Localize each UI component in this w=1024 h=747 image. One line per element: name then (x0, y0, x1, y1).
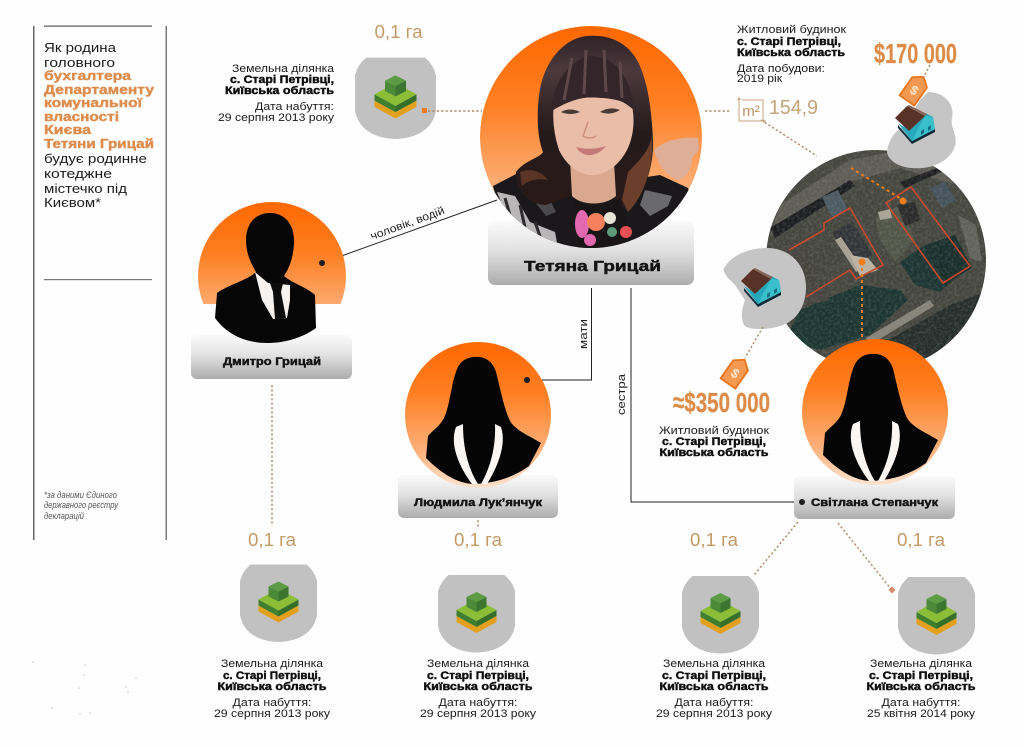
text: house two details: с. Старі Петрівці, (662, 436, 766, 448)
name box: Tetiana: Тетяна Грицай (524, 258, 661, 275)
house one group (887, 92, 956, 168)
dashed link: Svitlana second plot (838, 523, 891, 589)
dashed link: top plot (428, 110, 482, 112)
text: house two details (659, 425, 769, 459)
marker: top plot (422, 108, 427, 113)
dashed link: Dmytro plot (271, 385, 273, 526)
footnote: державного реєстру (44, 500, 118, 510)
intro text: комунальної (44, 95, 142, 110)
text: Liudmyla plot: 29 серпня 2013 року (420, 708, 537, 720)
text: Svitlana second plot: с. Старі Петрівці, (869, 670, 973, 682)
intro text: містечко під (44, 181, 127, 196)
intro text: котеджне (44, 166, 112, 181)
text: top plot: Земельна ділянка (232, 63, 335, 75)
text: Dmytro plot: Київська область (218, 681, 327, 693)
link dot: Svitlana (799, 499, 805, 505)
area: Liudmyla plot: 0,1 га (454, 530, 503, 550)
text: house one details: Житловий будинок (737, 24, 846, 36)
icon: land Svitlana first (682, 576, 759, 654)
intro text (44, 40, 155, 210)
dashed link: portrait to area (705, 110, 731, 112)
link dot: Liudmyla (524, 377, 530, 383)
orange circle: Svitlana (802, 339, 948, 485)
marker: house one (900, 198, 906, 204)
icon: land Liudmyla (438, 575, 515, 652)
hand (654, 138, 699, 180)
land plot: Svitlana first (656, 522, 798, 720)
dashed link: price one (923, 65, 930, 78)
text: Svitlana second plot: Київська область (866, 681, 976, 693)
person: Tetiana (480, 26, 702, 285)
text: Liudmyla plot: Дата набуття: (438, 697, 518, 709)
text: Svitlana second plot: 25 квітня 2014 року (867, 708, 976, 720)
orange circle: Dmytro (198, 202, 346, 304)
text: house two details: Київська область (660, 447, 769, 459)
icon: price tag two (721, 355, 752, 389)
dashed link: map to house one (761, 120, 817, 156)
intro text: Києва (44, 122, 92, 137)
footnote: *за даними Єдиного (44, 490, 117, 500)
dashed link: on map to house one (851, 168, 903, 200)
text: Dmytro plot: 29 серпня 2013 року (214, 708, 331, 720)
portrait (480, 26, 702, 250)
shirt (578, 198, 630, 248)
land parcels outlines (789, 187, 970, 297)
person: Dmytro (191, 202, 352, 379)
text: house one details: Київська область (737, 47, 845, 59)
intro text: головного (44, 55, 115, 70)
text: house one details: Дата побудови: (737, 63, 825, 75)
jacket (493, 172, 695, 250)
name box: Liudmyla: Людмила Лук’янчук (414, 497, 543, 509)
text: Svitlana second plot: Дата набуття: (882, 697, 960, 709)
neck (570, 166, 616, 204)
land plot: Svitlana second (838, 523, 976, 720)
text: top plot (218, 63, 335, 124)
text: house one details (737, 24, 846, 85)
icon: land top (355, 58, 436, 139)
intro text: будує родинне (44, 151, 147, 166)
orange circle: Liudmyla (405, 342, 551, 488)
footnote: декларацій (44, 511, 84, 521)
text: top plot: Дата набуття: (255, 101, 334, 113)
icon: land Svitlana second (898, 577, 975, 654)
text: Svitlana first plot: Дата набуття: (674, 697, 754, 709)
land plot: Liudmyla (420, 520, 537, 720)
dashed link: price two (745, 327, 763, 358)
mouth (576, 146, 606, 155)
dashed link: Liudmyla plot (477, 520, 479, 528)
text: top plot: Київська область (225, 85, 334, 97)
text: Dmytro plot: с. Старі Петрівці, (223, 670, 321, 682)
link: mother (527, 288, 592, 380)
panel: intro (33, 26, 167, 540)
person: Svitlana (794, 339, 955, 519)
intro text: Як родина (44, 40, 117, 55)
face (553, 98, 634, 175)
icon: land Dmytro (240, 564, 317, 642)
intro text: Департаменту (44, 82, 155, 97)
text: Svitlana second plot: Земельна ділянка (870, 658, 973, 670)
text: Liudmyla plot: с. Старі Петрівці, (427, 670, 529, 682)
eyes (561, 110, 580, 114)
dashed link: Svitlana first plot (754, 522, 798, 575)
text: Liudmyla plot: Земельна ділянка (427, 658, 530, 670)
footnote (44, 490, 118, 521)
link: husband (322, 200, 497, 263)
link dot: Dmytro (319, 260, 325, 266)
text: Liudmyla plot: Київська область (424, 681, 533, 693)
text: Liudmyla plot (420, 658, 537, 720)
house one blob (887, 92, 956, 168)
name box: Tetiana (488, 221, 694, 285)
hair (516, 36, 653, 212)
text: top plot: с. Старі Петрівці, (230, 74, 334, 86)
land plot: Dmytro (214, 385, 331, 720)
area: Dmytro plot: 0,1 га (248, 530, 297, 550)
label: husband: чоловік, водій (369, 205, 446, 243)
text: house two details: Житловий будинок (659, 425, 769, 437)
silhouette: woman (823, 354, 938, 481)
name box: Liudmyla (398, 475, 558, 518)
text: Svitlana first plot: Земельна ділянка (663, 658, 766, 670)
house two blob (724, 248, 806, 329)
person: Liudmyla (398, 342, 558, 518)
text: Svitlana first plot (656, 658, 773, 720)
link: sister (631, 288, 802, 502)
intro text: бухгалтера (44, 68, 132, 83)
icon: square metres: m² (742, 103, 760, 120)
label: mother: мати (578, 319, 590, 349)
intro text: Києвом* (44, 195, 101, 210)
satellite map (766, 150, 986, 359)
icon: house one (895, 105, 935, 144)
price: 350000: ≈$350 000 (673, 387, 770, 418)
name box: Svitlana: Світлана Степанчук (811, 497, 939, 509)
silhouette: woman (426, 357, 541, 484)
text: Dmytro plot: Дата набуття: (232, 697, 312, 709)
price: 170000: $170 000 (874, 38, 957, 69)
area: top plot: 0,1 га (374, 22, 424, 42)
text: Dmytro plot (214, 658, 331, 720)
name box: Dmytro: Дмитро Грицай (223, 356, 321, 368)
label: sister: сестра (616, 373, 628, 415)
text: Svitlana first plot: Київська область (660, 681, 769, 693)
bangs (550, 56, 634, 112)
dashed link: on map to house two (861, 262, 863, 340)
text: house one details: 2019 рік (737, 73, 782, 85)
area: Svitlana second plot: 0,1 га (897, 530, 946, 550)
area: Svitlana first plot: 0,1 га (690, 530, 739, 550)
marker: Svitlana second plot (888, 586, 896, 594)
marker: house two (858, 258, 866, 266)
area value: 154,9 (769, 97, 818, 119)
text: top plot: 29 серпня 2013 року (218, 112, 335, 124)
text: Dmytro plot: Земельна ділянка (221, 658, 324, 670)
icon: square metres (737, 97, 766, 123)
text: house one details: с. Старі Петрівці, (737, 36, 841, 48)
text: Svitlana first plot: 29 серпня 2013 року (656, 708, 773, 720)
intro text: власності (44, 109, 119, 124)
house two group (724, 248, 806, 329)
name box: Svitlana (794, 476, 955, 519)
icon: house two (741, 268, 781, 307)
land plot: top (218, 22, 482, 139)
intro text: Тетяни Грицай (44, 136, 154, 151)
silhouette: man (215, 213, 316, 343)
icon: price tag one (900, 72, 931, 106)
name box: Dmytro (191, 335, 352, 379)
text: Svitlana first plot: с. Старі Петрівці, (662, 670, 766, 682)
text: Svitlana second plot (866, 658, 976, 720)
